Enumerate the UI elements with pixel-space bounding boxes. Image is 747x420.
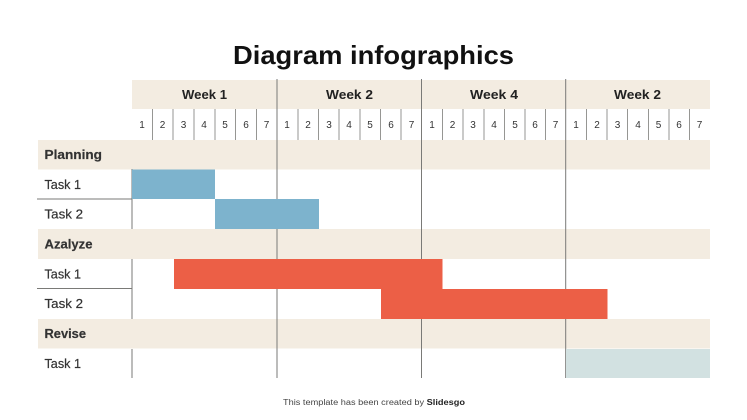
- row labels: Planning: [44, 148, 102, 162]
- bar: azalyze task 2: [381, 289, 608, 319]
- gantt chart: [37, 79, 710, 378]
- day numbers: 4: [635, 120, 641, 131]
- title: Diagram infographics: [233, 40, 514, 70]
- day numbers: 5: [367, 120, 373, 131]
- week labels: [182, 88, 661, 102]
- row labels: [44, 148, 102, 371]
- day numbers: [139, 120, 703, 131]
- day numbers: 3: [615, 120, 621, 131]
- day ticks: [152, 109, 690, 140]
- day numbers: 1: [573, 120, 579, 131]
- week header band: [132, 80, 710, 109]
- bar: azalyze task 1: [174, 259, 442, 289]
- bar: revise task 1: [566, 349, 710, 378]
- day numbers: 6: [676, 120, 682, 131]
- day numbers: 5: [512, 120, 518, 131]
- day numbers: 6: [243, 120, 249, 131]
- day numbers: 2: [594, 120, 600, 131]
- week labels: Week 2: [326, 88, 373, 102]
- day numbers: 7: [697, 120, 703, 131]
- day numbers: 5: [656, 120, 662, 131]
- section band: azalyze: [38, 229, 710, 259]
- day numbers: 2: [450, 120, 456, 131]
- bar: planning task 2: [215, 199, 319, 229]
- week labels: Week 1: [182, 88, 227, 102]
- row labels: Task 2: [44, 208, 83, 222]
- day numbers: 7: [553, 120, 559, 131]
- footer credit: This template has been created by Slidesgo: [283, 398, 465, 407]
- day numbers: 4: [491, 120, 497, 131]
- row labels: Task 1: [44, 357, 81, 371]
- day numbers: 7: [409, 120, 415, 131]
- day numbers: 3: [470, 120, 476, 131]
- day numbers: 4: [201, 120, 207, 131]
- week labels: Week 2: [614, 88, 661, 102]
- section band: planning: [38, 140, 710, 170]
- row labels: Task 1: [44, 268, 81, 282]
- day numbers: 2: [160, 120, 166, 131]
- section band: revise: [38, 319, 710, 348]
- day numbers: 4: [346, 120, 352, 131]
- row labels: Task 1: [44, 178, 81, 192]
- day numbers: 3: [326, 120, 332, 131]
- day numbers: 7: [264, 120, 270, 131]
- week dividers: [37, 79, 566, 378]
- row labels: Task 2: [44, 297, 83, 311]
- day numbers: 1: [284, 120, 290, 131]
- row labels: Azalyze: [44, 238, 93, 252]
- day numbers: 3: [181, 120, 187, 131]
- day numbers: 6: [388, 120, 394, 131]
- day numbers: 5: [222, 120, 228, 131]
- day numbers: 1: [139, 120, 145, 131]
- row labels: Revise: [44, 327, 86, 341]
- day numbers: 2: [305, 120, 311, 131]
- bar: planning task 1: [132, 170, 215, 199]
- day numbers: 6: [532, 120, 538, 131]
- day numbers: 1: [429, 120, 435, 131]
- week labels: Week 4: [470, 88, 518, 102]
